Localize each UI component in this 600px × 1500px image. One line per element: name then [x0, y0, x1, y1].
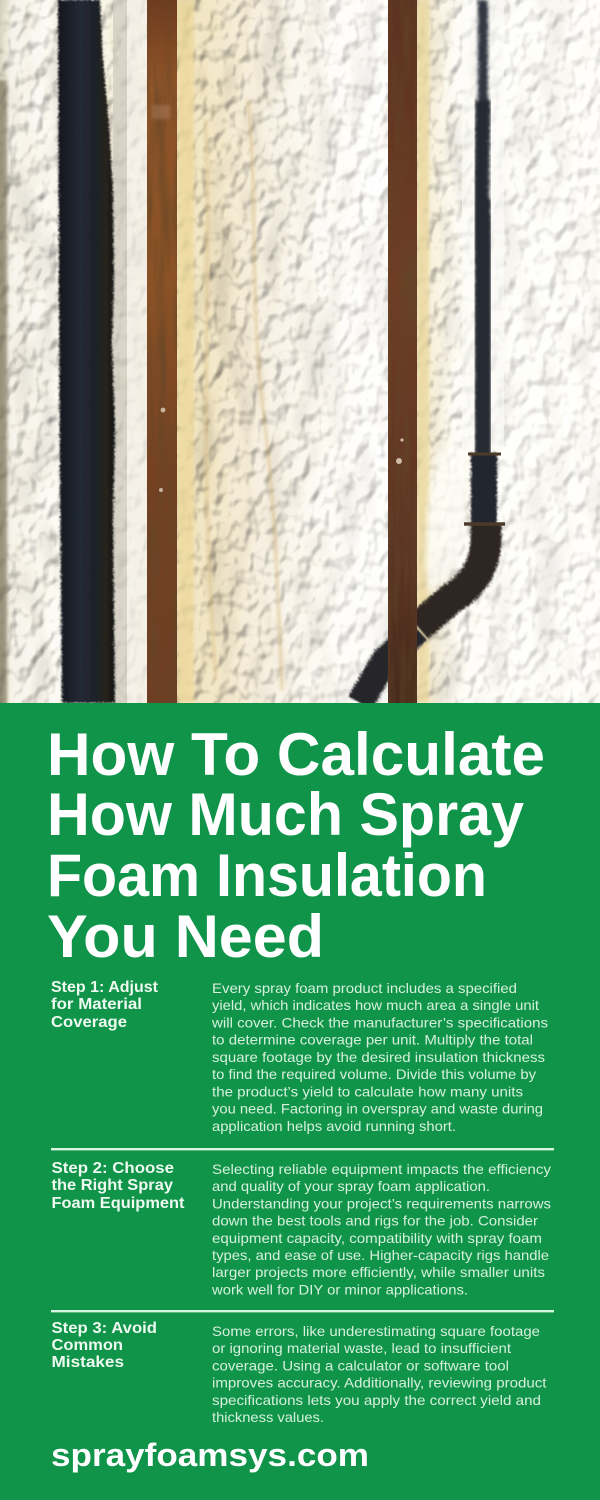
title: How Much Spray — [47, 781, 525, 848]
step 1 body text: to determine coverage per unit. Multiply the total — [212, 1033, 533, 1048]
step 1 body text — [211, 981, 548, 1134]
step 2 body text: equipment capacity, compatibility with spray foam — [212, 1231, 542, 1246]
step 1 body text: yield, which indicates how much area a single unit — [212, 998, 539, 1013]
step 2 heading: the Right Spray — [52, 1177, 173, 1194]
step 3 body text: or ignoring material waste, lead to insufficient — [212, 1341, 511, 1356]
title: Foam Insulation — [47, 842, 487, 909]
wood stud 2 — [388, 0, 417, 703]
foam background — [0, 0, 600, 733]
step 2 heading — [52, 1160, 184, 1212]
step 1 body text: square footage by the desired insulation thickness — [212, 1050, 545, 1065]
step 3 heading: Step 3: Avoid — [52, 1320, 157, 1337]
title — [47, 721, 545, 970]
step 1 body text: application helps avoid running short. — [212, 1119, 456, 1134]
step 2 heading: Step 2: Choose — [52, 1160, 174, 1177]
step 3 body text: specifications lets you apply the correct yield and — [212, 1393, 541, 1408]
step 2 body text: Understanding your project’s requirements narrows — [212, 1196, 551, 1211]
footer website: sprayfoamsys.com — [51, 1437, 369, 1473]
step 2 body text: Selecting reliable equipment impacts the efficiency — [212, 1162, 551, 1177]
step 2 body text: down the best tools and rigs for the job. Consider — [212, 1214, 538, 1229]
step 2 heading: Foam Equipment — [52, 1195, 184, 1212]
step 1 heading — [51, 979, 158, 1031]
step 1 heading: Step 1: Adjust — [51, 979, 158, 996]
step 1 body text: Every spray foam product includes a specified — [212, 981, 517, 996]
foam lumps around elbow — [425, 446, 470, 590]
step 2 body text: work well for DIY or minor applications. — [211, 1282, 468, 1297]
title: How To Calculate — [47, 721, 545, 788]
step 3 body text: thickness values. — [212, 1410, 324, 1425]
step 3 heading: Mistakes — [52, 1354, 124, 1371]
step 1 body text: will cover. Check the manufacturer’s specifications — [211, 1016, 548, 1030]
step 1 body text: to find the required volume. Divide this volume by — [212, 1067, 536, 1082]
panel: green text panel — [47, 721, 554, 1473]
step 3 heading — [52, 1320, 157, 1371]
step 3 body text: Some errors, like underestimating square footage — [212, 1324, 540, 1339]
step 1 body text: the product’s yield to calculate how many units — [212, 1084, 523, 1100]
left black pipe — [58, 0, 115, 703]
step 1 heading: for Material — [51, 996, 142, 1013]
step 3 body text: coverage. Using a calculator or software tool — [212, 1358, 509, 1373]
step 3 body text: improves accuracy. Additionally, reviewing product — [212, 1376, 547, 1391]
step 2 body text: larger projects more efficiently, while smaller units — [212, 1265, 545, 1280]
step 1 body text: you need. Factoring in overspray and waste during — [212, 1102, 543, 1117]
photo: spray foam insulation between wall studs with black pipes — [0, 0, 600, 703]
right black pipe with elbow — [360, 0, 505, 703]
step 2 body text — [211, 1162, 551, 1297]
title: You Need — [47, 903, 324, 970]
wood stud 1 — [147, 0, 177, 703]
step 2 body text: types, and ease of use. Higher-capacity rigs handle — [212, 1248, 549, 1263]
step 2 body text: and quality of your spray foam application. — [212, 1179, 490, 1194]
step 3 body text — [212, 1324, 547, 1425]
step 1 heading: Coverage — [51, 1014, 127, 1031]
step 3 heading: Common — [52, 1337, 123, 1354]
